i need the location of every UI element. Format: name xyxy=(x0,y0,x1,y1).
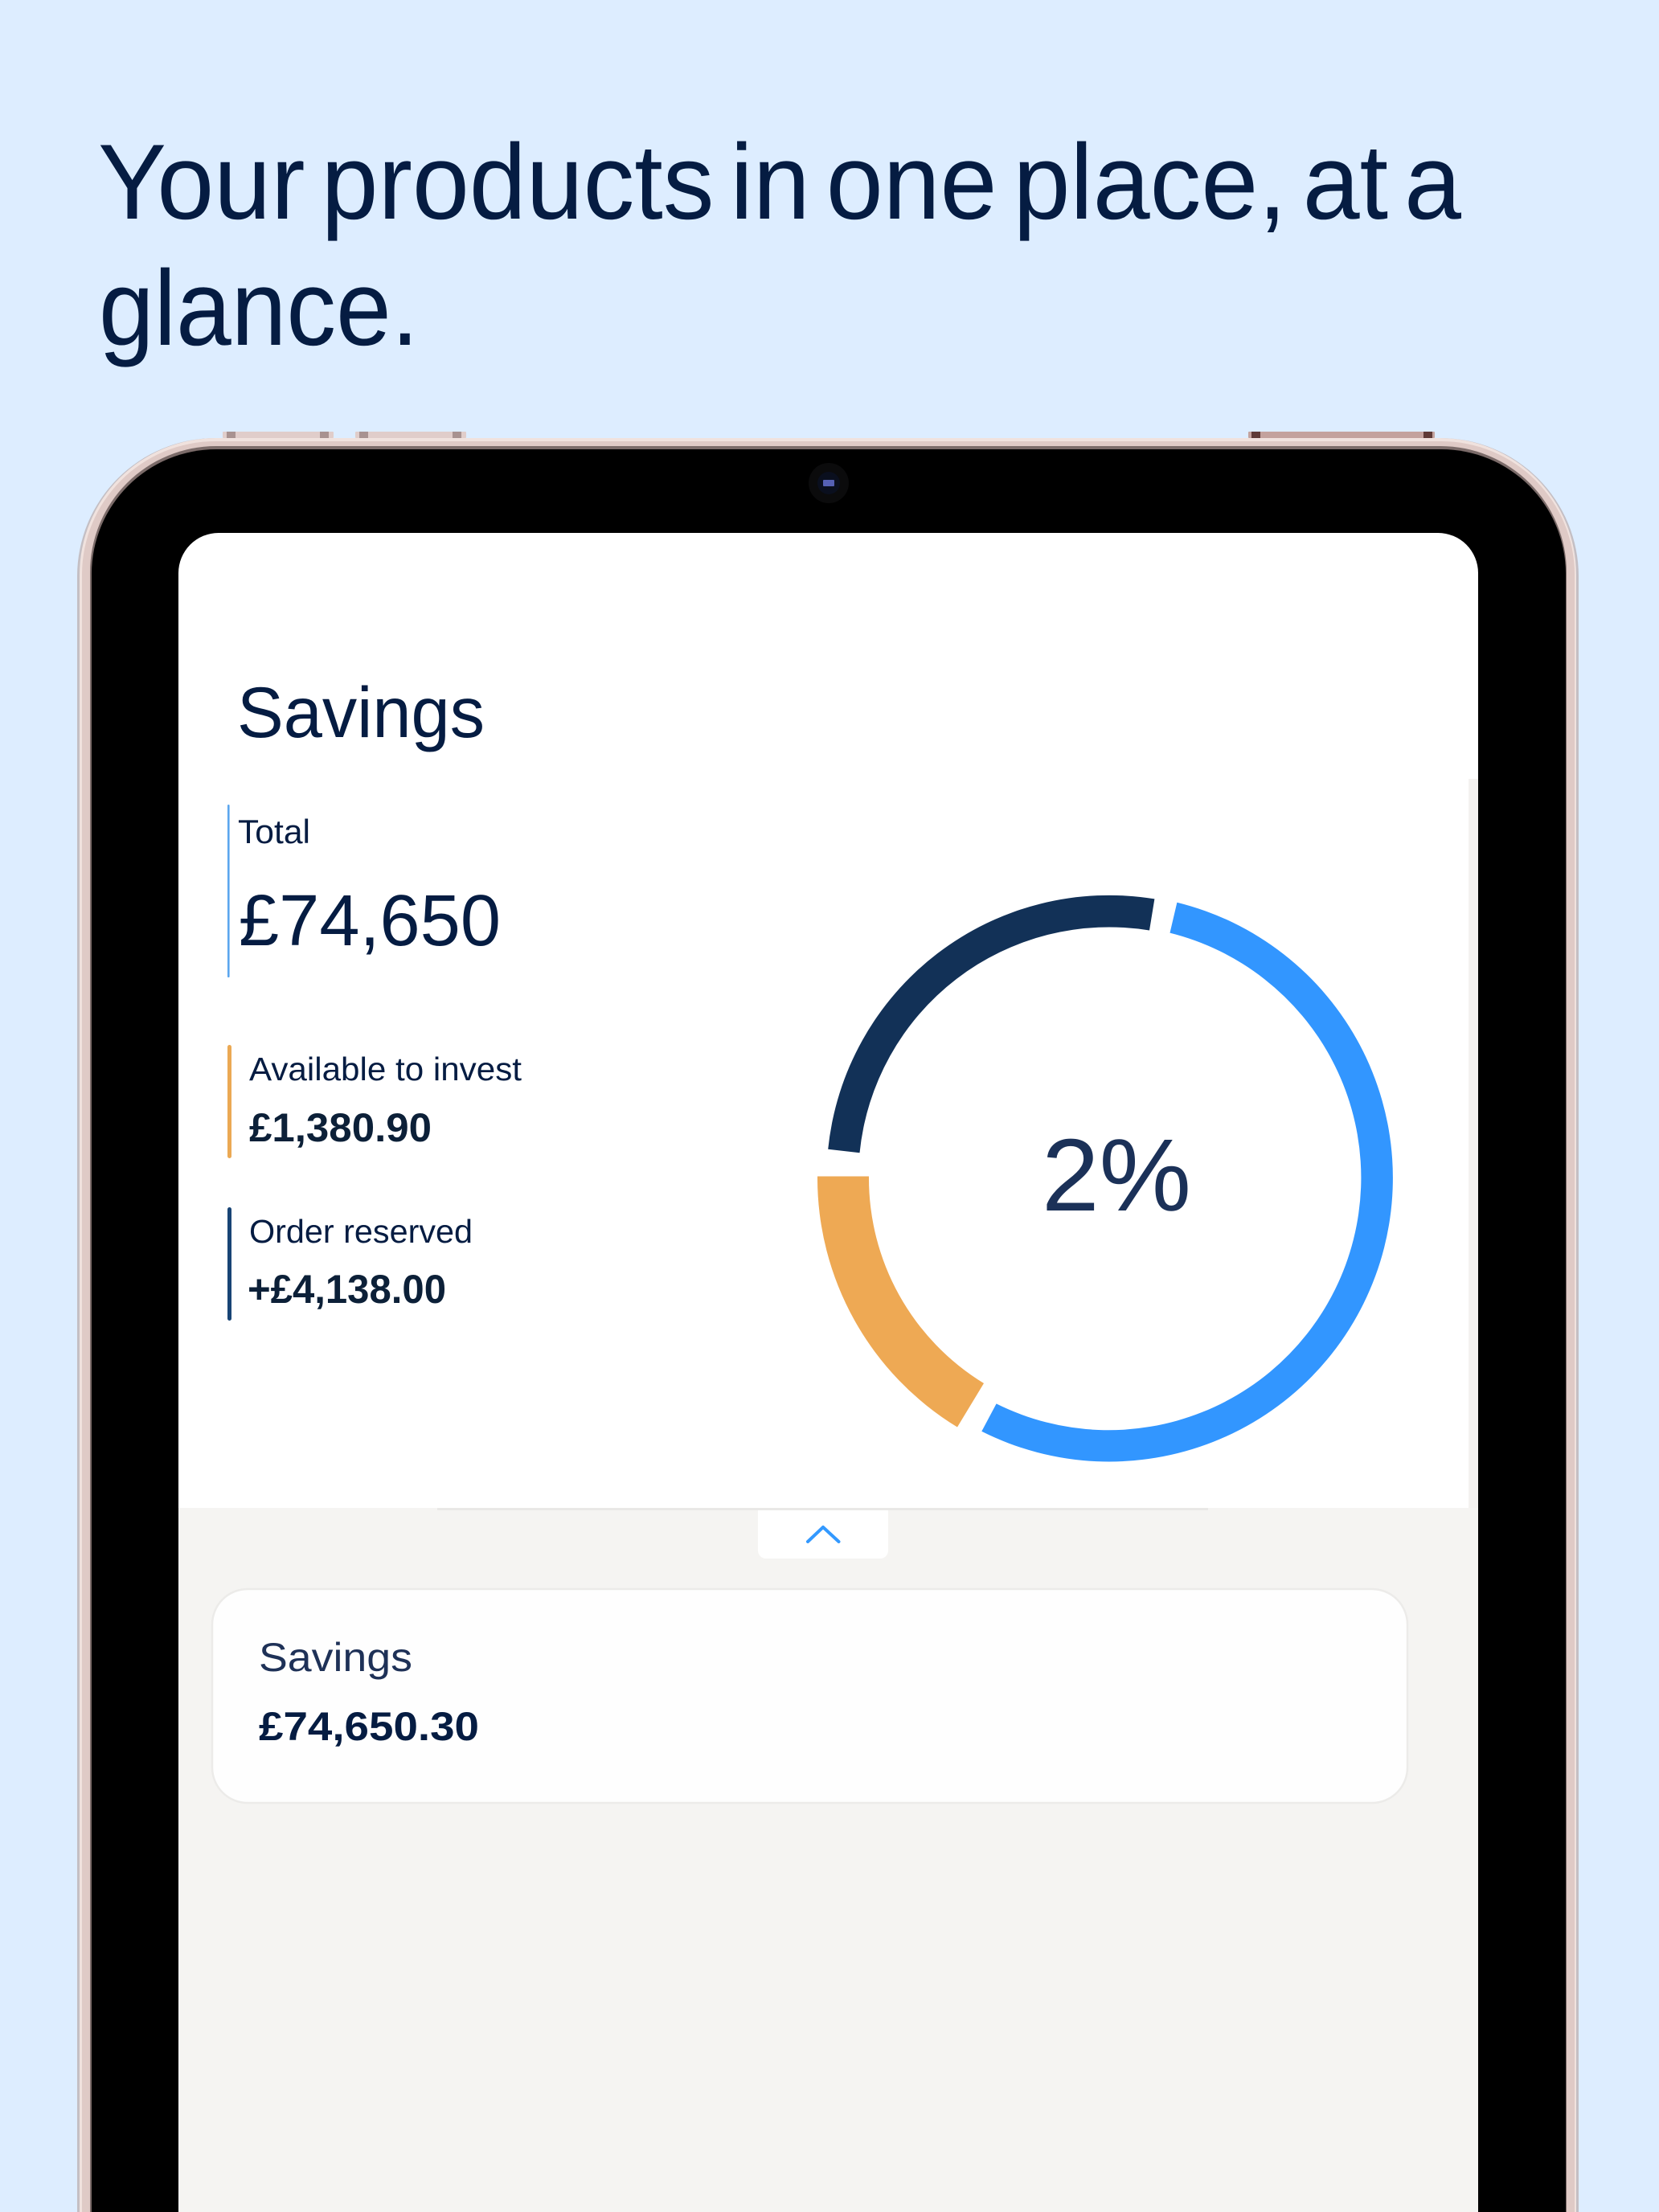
tablet frame xyxy=(77,438,1579,2212)
lower grey panel xyxy=(178,1508,1478,2212)
segment: navy xyxy=(828,895,1154,1153)
title: Your products in one place, at a xyxy=(98,123,1461,242)
savings card: Savings xyxy=(259,1635,412,1680)
total block: Total xyxy=(238,813,310,850)
savings card: £74,650.30 xyxy=(259,1704,479,1749)
segment: blue xyxy=(981,903,1393,1461)
available to invest block xyxy=(227,1045,522,1158)
title xyxy=(98,123,1461,368)
segment: orange xyxy=(817,1177,984,1428)
right edge strip xyxy=(1469,779,1478,1508)
savings card xyxy=(212,1589,1407,1803)
title: glance. xyxy=(99,249,419,368)
order reserved block: Order reserved xyxy=(249,1213,473,1250)
tablet top buttons xyxy=(223,432,1435,438)
icon: chevron up xyxy=(808,1527,839,1542)
donut centre value: 2% xyxy=(1042,1118,1191,1233)
order reserved block: +£4,138.00 xyxy=(248,1267,446,1312)
available to invest block: Available to invest xyxy=(249,1051,522,1088)
screen xyxy=(178,533,1478,2212)
savings heading: Savings xyxy=(237,672,485,752)
order reserved block xyxy=(227,1207,473,1321)
tablet device xyxy=(77,432,1579,2212)
total block: £74,650 xyxy=(239,881,501,961)
camera xyxy=(809,463,849,503)
available to invest block: £1,380.90 xyxy=(249,1105,432,1150)
collapse tab with chevron xyxy=(758,1510,888,1559)
donut chart xyxy=(817,895,1393,1461)
total block xyxy=(227,805,501,977)
